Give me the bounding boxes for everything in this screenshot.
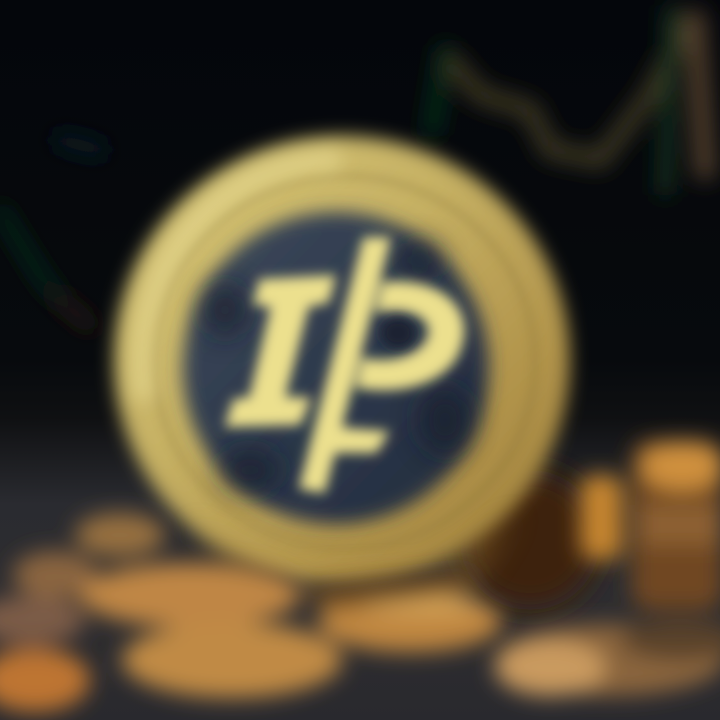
coin lower shade [190,510,520,585]
coin glyph [226,238,463,492]
coin stack [580,475,622,560]
coin ring highlight [142,160,340,400]
coin pile right [495,440,720,696]
coin pile [75,513,165,557]
glyph letter I [226,276,335,426]
main coin [114,136,570,585]
coin ring inner shadow band [155,176,535,548]
glyph P counter [381,318,415,348]
coin pile left and centre [0,513,502,712]
glyph slash and P [300,238,390,492]
coin navy centre [183,212,489,524]
glow behind right coins [460,470,600,610]
coin outer ring [114,136,570,584]
background chart lines [0,10,705,325]
coin centre dark patches [203,242,471,492]
